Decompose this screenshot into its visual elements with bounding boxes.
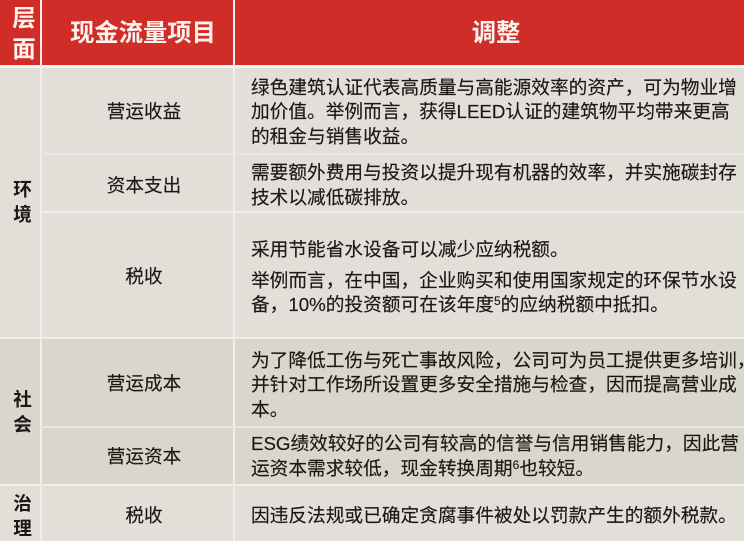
panel: social rows background	[0, 338, 744, 485]
item: working capital: 营运资本	[107, 446, 181, 467]
label: governance level	[13, 493, 32, 538]
text: operating cost adjustment: 并针对工作场所设置更多安全措施与检查，因而提高营业成	[251, 374, 737, 395]
item: operating cost: 营运成本	[107, 373, 181, 394]
text: governance tax adjustment: 因违反法规或已确定贪腐事件被处以罚款产生的额外税款。	[251, 505, 737, 526]
text: operating revenue adjustment: 加价值。举例而言，获得LEED认证的建筑物平均带来更高	[251, 101, 730, 122]
label: social level: 会	[13, 414, 32, 434]
text: operating cost adjustment: 本。	[251, 398, 288, 420]
heading: level column	[12, 5, 36, 62]
heading: adjustment column: 调整	[472, 20, 520, 47]
text: working capital adjustment: ESG绩效较好的公司有较高的信誉与信用销售能力，因此营	[251, 433, 739, 454]
text: capital expenditure adjustment	[251, 162, 737, 208]
text: tax example China: 备，10%的投资额可在该年度5的应纳税额中抵扣。	[251, 294, 669, 315]
item: tax environment: 税收	[125, 266, 163, 287]
text: working capital adjustment	[251, 433, 739, 479]
item: operating revenue: 营运收益	[107, 101, 181, 122]
text: tax saving note: 采用节能省水设备可以减少应纳税额。	[251, 239, 569, 260]
label: environment level	[13, 179, 32, 224]
label: governance level: 治	[13, 493, 32, 514]
item: capital expenditure: 资本支出	[107, 175, 181, 196]
heading: level column: 层	[12, 5, 36, 31]
text: capital expenditure adjustment: 技术以减低碳排放。	[251, 187, 419, 208]
text: tax example China: 举例而言，在中国，企业购买和使用国家规定的环保节水设	[251, 270, 737, 290]
text: operating revenue adjustment: 的租金与销售收益。	[251, 126, 419, 146]
label: social level	[13, 389, 32, 434]
text: capital expenditure adjustment: 需要额外费用与投资以提升现有机器的效率，并实施碳封存	[251, 162, 737, 183]
label: environment level: 境	[13, 204, 32, 224]
text: operating cost adjustment: 为了降低工伤与死亡事故风险，公司可为员工提供更多培训，	[251, 350, 744, 370]
label: social level: 社	[13, 389, 32, 410]
text: working capital adjustment: 运资本需求较低，现金转换周期6也较短。	[251, 458, 594, 479]
text: tax example China	[251, 270, 737, 315]
text: operating revenue adjustment	[251, 76, 737, 146]
panel: table header bar	[0, 0, 744, 65]
label: environment level: 环	[13, 179, 32, 200]
text: operating revenue adjustment: 绿色建筑认证代表高质量与高能源效率的资产，可为物业增	[251, 76, 737, 98]
heading: level column: 面	[12, 36, 36, 62]
heading: cash flow item column: 现金流量项目	[70, 20, 216, 47]
item: tax governance: 税收	[125, 505, 163, 526]
text: operating cost adjustment	[251, 350, 744, 420]
label: governance level: 理	[13, 518, 32, 538]
